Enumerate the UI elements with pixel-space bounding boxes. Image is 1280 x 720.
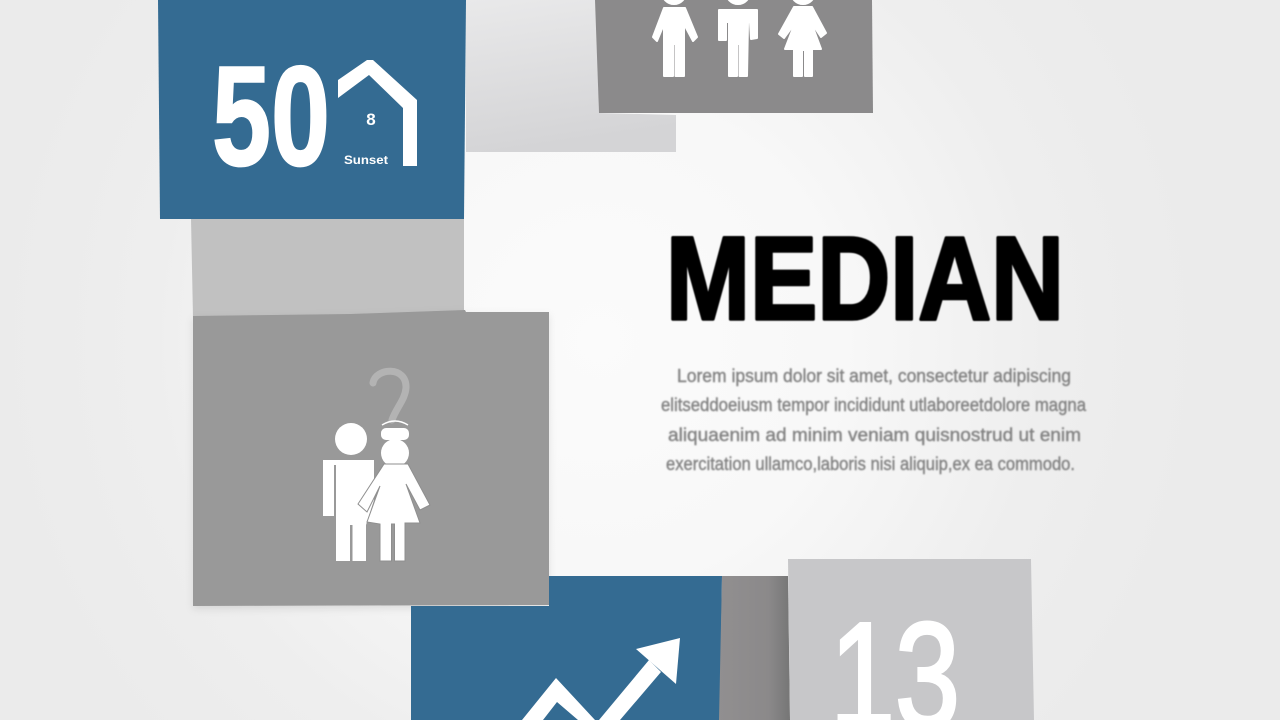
icon: woman — [779, 0, 826, 76]
icon: question mark — [373, 371, 406, 420]
panel: grey couple — [193, 310, 549, 606]
text block: body copy: elitseddoeiusm tempor incididunt utlaboreetdolore magna — [661, 395, 1087, 415]
infographic canvas — [158, 0, 1087, 720]
panel: light grey stat — [788, 559, 1034, 720]
text block: body copy: Lorem ipsum dolor sit amet, consectetur adipiscing — [677, 366, 1071, 386]
small label: Sunset — [344, 153, 388, 167]
stat number 50: 50 — [212, 37, 330, 196]
panel: light grey top block — [466, 0, 676, 152]
small label symbol: 8 — [366, 110, 376, 129]
icon: house outline — [338, 60, 417, 166]
text block: body copy — [661, 366, 1087, 474]
icon: man figure — [323, 423, 374, 561]
icon: woman figure — [358, 421, 430, 561]
text block: body copy: aliquaenim ad minim veniam quisnostrud ut enim — [668, 425, 1081, 445]
icon: rising arrow — [522, 638, 680, 720]
panel: blue housing stat — [158, 0, 466, 219]
panel: dark grey strip — [719, 576, 790, 720]
panel: dark grey people — [595, 0, 873, 113]
text block: body copy: exercitation ullamco,laboris nisi aliquip,ex ea commodo. — [666, 454, 1075, 474]
panel: blue growth — [411, 576, 722, 720]
icon: man — [719, 0, 757, 76]
panel: light grey middle block — [191, 218, 464, 318]
title: MEDIAN — [666, 213, 1064, 345]
icon: man with splayed arms — [653, 0, 697, 76]
